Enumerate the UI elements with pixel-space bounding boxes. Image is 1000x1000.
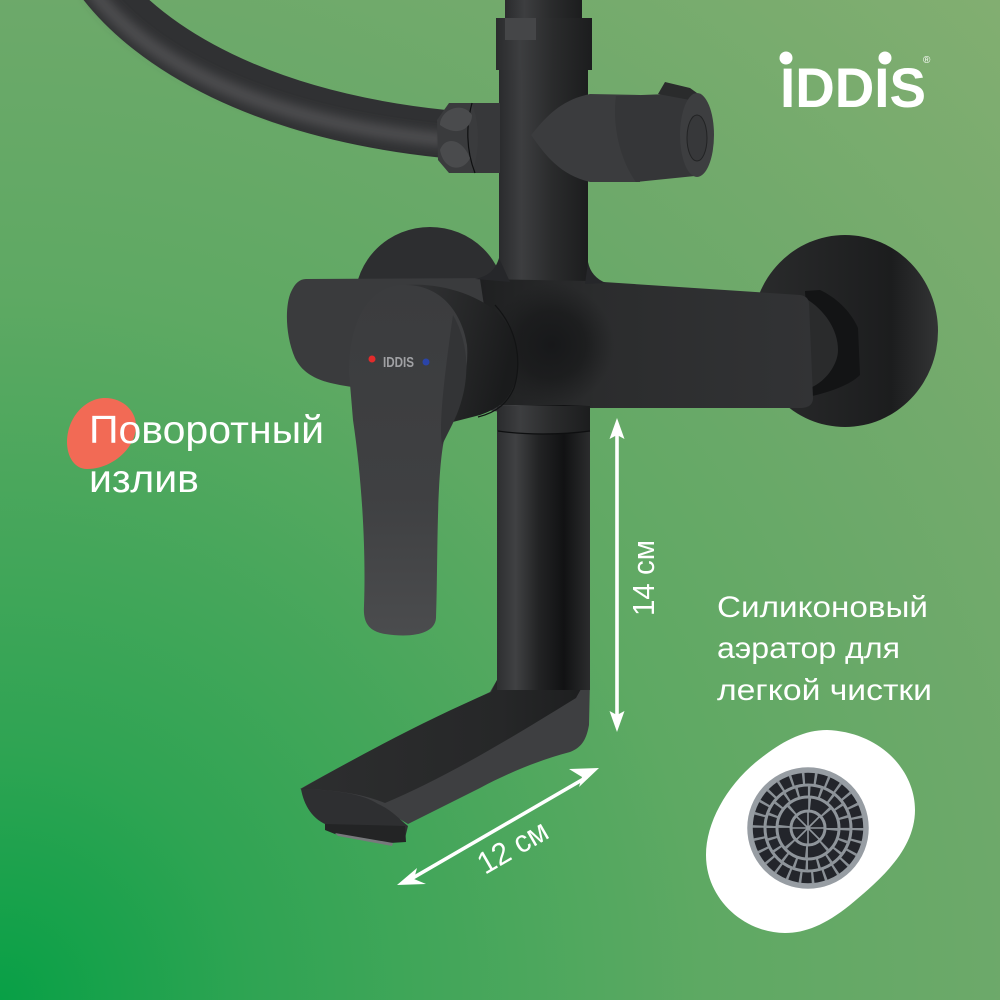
length label: 12 см (471, 813, 554, 881)
length dimension (397, 768, 599, 885)
swivel spout (300, 405, 590, 846)
collar flat facet (505, 18, 536, 40)
ring middle (777, 797, 839, 859)
left wall flange (355, 227, 505, 373)
description line 2: аэратор для (717, 632, 900, 665)
aerator description (717, 591, 932, 707)
diverter cap (680, 93, 714, 177)
nut neck (470, 103, 500, 173)
dark hub shading (490, 283, 614, 407)
callout text line 2: излив (89, 458, 199, 501)
handle lever (349, 285, 467, 635)
diverter lever (658, 82, 698, 102)
handle cartridge seam (478, 305, 518, 417)
aerator mesh (750, 770, 866, 886)
registered mark: ® (923, 55, 931, 66)
spout tip face (301, 789, 408, 838)
handle cartridge (405, 285, 518, 424)
diverter cone (531, 94, 640, 182)
handle logo: IDDIS (383, 354, 414, 371)
right wall flange (752, 235, 938, 427)
outer mesh spokes (758, 778, 858, 878)
diverter switch (531, 82, 714, 182)
handle fold shadow (441, 315, 466, 445)
cold indicator (422, 358, 430, 366)
diverter cylinder (615, 93, 713, 182)
height dimension (610, 418, 661, 732)
aerator illustration (706, 730, 915, 933)
diverter button (687, 115, 707, 161)
middle mesh spokes (771, 791, 845, 865)
brand logo (780, 52, 931, 119)
body right section (480, 279, 813, 412)
logo dot second (878, 52, 892, 64)
length arrow (397, 768, 599, 885)
upper vertical pipe (496, 0, 592, 310)
aerator rim (335, 833, 393, 846)
description line 1: Силиконовый (717, 591, 928, 624)
logo wordmark: IDDIS (780, 56, 926, 119)
height arrow (610, 418, 624, 732)
centre spokes (791, 811, 825, 845)
pipe shaft (499, 60, 588, 310)
body left end (287, 278, 500, 412)
top narrow pipe (505, 0, 582, 20)
right fillet to pipe (585, 262, 606, 284)
ring inner (791, 811, 825, 845)
callout text line 1: Поворотный (89, 409, 324, 452)
spout aerator (325, 824, 406, 843)
spout collar seam (498, 431, 590, 434)
mixer handle (349, 285, 518, 635)
spout underside (300, 680, 590, 824)
mixer body (287, 258, 813, 412)
nut hexagon (437, 103, 478, 173)
logo dot first (780, 52, 792, 64)
nut facets (440, 108, 472, 168)
hot indicator (368, 356, 376, 362)
hose nut (437, 103, 500, 173)
hose tube (100, 0, 445, 134)
nut inner barrel (805, 298, 838, 388)
nut seam (468, 103, 475, 173)
mesh base (750, 770, 866, 886)
spout top plane (301, 680, 586, 803)
white blob (706, 730, 915, 933)
description line 3: легкой чистки (717, 674, 932, 707)
left fillet to pipe (475, 258, 510, 282)
pipe collar (496, 18, 592, 70)
shower hose (92, 0, 445, 140)
accent blob (67, 398, 136, 469)
hose highlight (92, 0, 445, 140)
height label: 14 см (626, 540, 661, 616)
nut outer (805, 290, 860, 396)
spout vertical pipe (497, 405, 590, 690)
spout collar (497, 406, 590, 434)
inner mesh spokes (784, 804, 832, 852)
right connector nut (805, 290, 860, 396)
callout: swivel spout (67, 398, 324, 501)
ring outer (765, 785, 851, 871)
